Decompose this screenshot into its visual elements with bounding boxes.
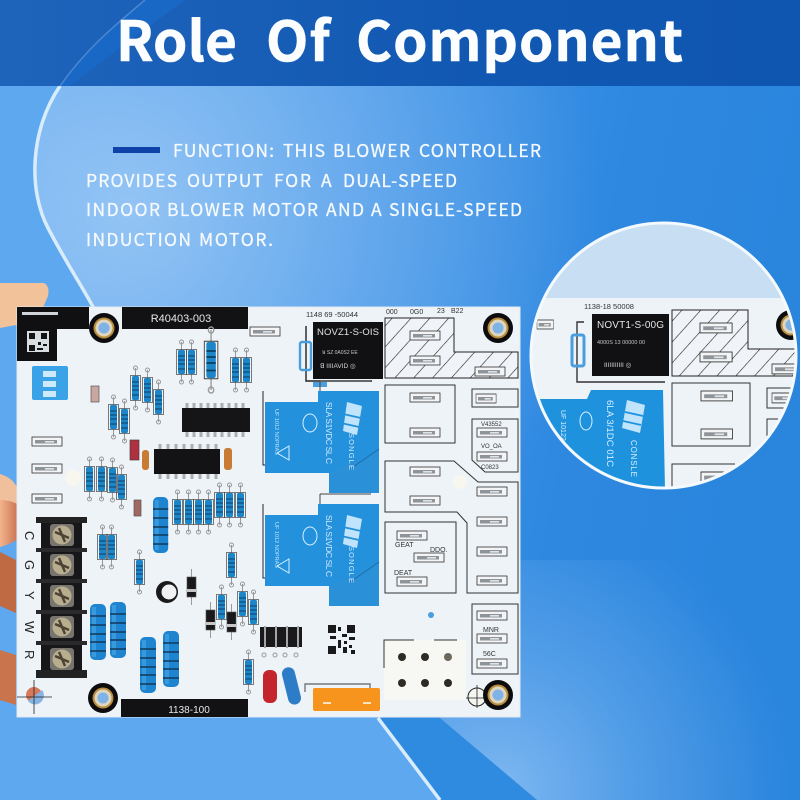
electrolytic capacitor [156,581,178,603]
function text: PROVIDES [86,168,177,193]
zoom: blue relay: CONSLE [629,440,638,477]
blue capacitor [281,666,302,706]
relay K1 [263,381,379,493]
silkscreen labels: 0G0 [410,309,423,316]
terminal boxes [385,385,518,674]
function text: THIS [283,138,325,163]
model label: 1138-100 [168,705,210,716]
silkscreen labels: MNR [483,627,499,634]
black relay [300,322,383,387]
chip U1 [182,403,250,437]
silkscreen labels: 56C [483,651,496,658]
small resistors [84,327,258,694]
function text: BLOWER [333,138,410,163]
terminal letters: W [22,621,37,634]
silkscreen labels: VO_OA [481,444,502,450]
silkscreen labels: V43552 [481,422,502,428]
zoom: terminal boxes [672,383,800,490]
fingers [0,283,48,705]
background: white curve [35,86,440,800]
zoom: black relay: NOVT1-S-00G [597,320,664,331]
registration marks [17,680,490,714]
black relay: ꓤ SZ 0A0S2 EE [322,350,358,356]
function text: CONTROLLER [419,138,541,163]
background: light bottom glow [440,560,800,800]
function text: MOTOR. [199,227,273,252]
silkscreen labels [386,308,502,658]
zoom: clip blue [572,335,584,366]
zoom: black relay [592,314,669,376]
four black diodes [260,626,302,657]
silkscreen labels: DDO. [430,547,448,554]
zoom: mounting hole [776,310,794,340]
relay K2 [263,494,379,606]
mounting hole top right [483,313,513,343]
silkscreen labels: 23 [437,308,445,315]
silkscreen labels: 000 [386,309,398,316]
function dash [113,147,160,153]
function text: A [321,168,332,193]
zoom: relay clip [577,322,665,382]
zoom circle [530,222,800,490]
title [116,0,683,77]
circuit board [17,307,520,717]
black corner marking with QR [17,307,89,361]
blue test dot [428,612,434,618]
zoom: blue relay [535,390,665,490]
function text: OUTPUT [187,168,263,193]
terminal letters [22,531,37,659]
part number label: R40403-003 [151,313,211,325]
black relay: NOVZ1-S-OIS [317,327,379,338]
header band [0,0,800,86]
background: dark bottom band [378,718,537,800]
zoom: hatched zone [672,310,800,376]
function text: SINGLE-SPEED [389,197,522,222]
function text: MOTOR [252,197,318,222]
spade terminals [32,327,507,668]
dip switch [32,366,68,400]
function text: INDUCTION [86,227,191,252]
function text [86,138,541,252]
function text: FOR [274,168,311,193]
silkscreen labels: DEAT [394,570,413,577]
model label [121,699,248,717]
terminal letters: C [22,531,37,540]
board code: 1148 69 -50044 [306,310,358,319]
zoom: board code: 1138-18 50008 [584,302,634,311]
terminal letters: R [22,650,37,659]
orange fuse [305,684,380,711]
diodes and small capacitors [65,386,467,640]
mounting hole top left [89,313,119,343]
silkscreen labels: GEAT [395,542,414,549]
chip U2 [154,444,220,479]
red capacitor [263,670,277,703]
large blue resistors [90,497,179,693]
function text: INDOOR [86,197,160,222]
hatched copper zone [385,318,518,378]
zoom: blue relay: UF 10122 [559,410,566,441]
zoom: black relay: IIIIIIIIIII ◎ [604,362,632,369]
terminal block [36,517,87,678]
silkscreen labels: C0823 [481,465,499,471]
terminal letters: Y [22,591,37,600]
terminal letters: G [22,560,37,570]
zoom: terminals [537,320,800,483]
zoom: black relay: 4000S 13 00000 00 [597,340,645,346]
black relay: ꓭ IIIIAVID ◎ [320,362,356,370]
part number label [122,307,248,329]
mounting hole bottom left [88,683,118,713]
six pin connector [384,640,466,700]
function text: BLOWER [167,197,244,222]
function text: A [371,197,382,222]
function text: DUAL-SPEED [343,168,457,193]
function text: FUNCTION: [173,138,274,163]
silkscreen labels: B22 [451,308,464,315]
zoom: blue relay: 6LA 3/1DC 01C [604,400,615,467]
function text: AND [326,197,364,222]
board QR code [328,625,355,654]
mounting hole bottom right [483,680,513,710]
